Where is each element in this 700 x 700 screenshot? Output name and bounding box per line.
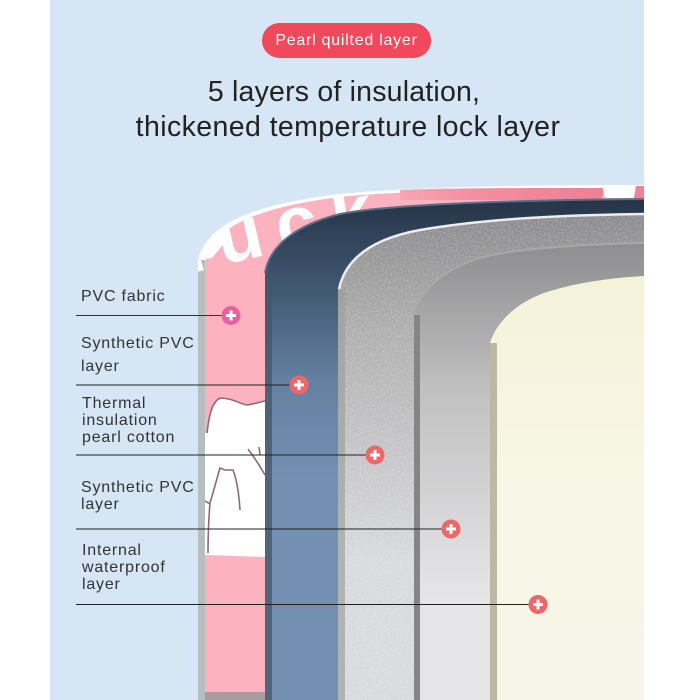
white margin right of illustration [644, 0, 700, 700]
pill label: Pearl quilted layer [275, 32, 418, 49]
cartoon print on fabric [205, 398, 265, 700]
callout: pearl cotton marker [76, 446, 384, 464]
layer: thermal insulation pearl cotton [338, 210, 644, 700]
title: 5 layers of insulation, [208, 76, 480, 108]
label: internal waterproof layer: Internal [82, 542, 142, 559]
label: synthetic PVC layer [81, 335, 195, 375]
layer: synthetic PVC layer [265, 199, 644, 700]
layer: internal waterproof layer [490, 276, 644, 700]
label: thermal insulation pearl cotton [82, 395, 175, 446]
callout: second synthetic PVC marker [76, 520, 460, 538]
title [136, 76, 560, 143]
label: PVC fabric: PVC fabric [81, 288, 165, 305]
label: second synthetic PVC layer: Synthetic PVC [81, 479, 195, 496]
cutaway illustration of insulation layers [198, 185, 644, 700]
title: thickened temperature lock layer [136, 111, 560, 143]
label: thermal insulation pearl cotton: pearl cotton [82, 429, 175, 446]
label: internal waterproof layer: layer [82, 576, 121, 593]
pill label [262, 23, 431, 58]
layer: synthetic PVC inner layer [414, 243, 644, 700]
callout: synthetic PVC layer marker [76, 376, 308, 394]
label: synthetic PVC layer: layer [81, 358, 120, 375]
label: internal waterproof layer [82, 542, 166, 593]
label: internal waterproof layer: waterproof [82, 559, 166, 576]
layer: PVC fabric [198, 185, 644, 700]
label: thermal insulation pearl cotton: insulation [82, 412, 158, 429]
callout: PVC fabric marker [76, 306, 240, 325]
label: second synthetic PVC layer [81, 479, 195, 513]
label: thermal insulation pearl cotton: Thermal [82, 395, 146, 412]
decorative lettering on fabric: duck [198, 194, 369, 272]
label: second synthetic PVC layer: layer [81, 496, 120, 513]
label: synthetic PVC layer: Synthetic PVC [81, 335, 195, 352]
callout: waterproof layer marker [76, 595, 548, 614]
